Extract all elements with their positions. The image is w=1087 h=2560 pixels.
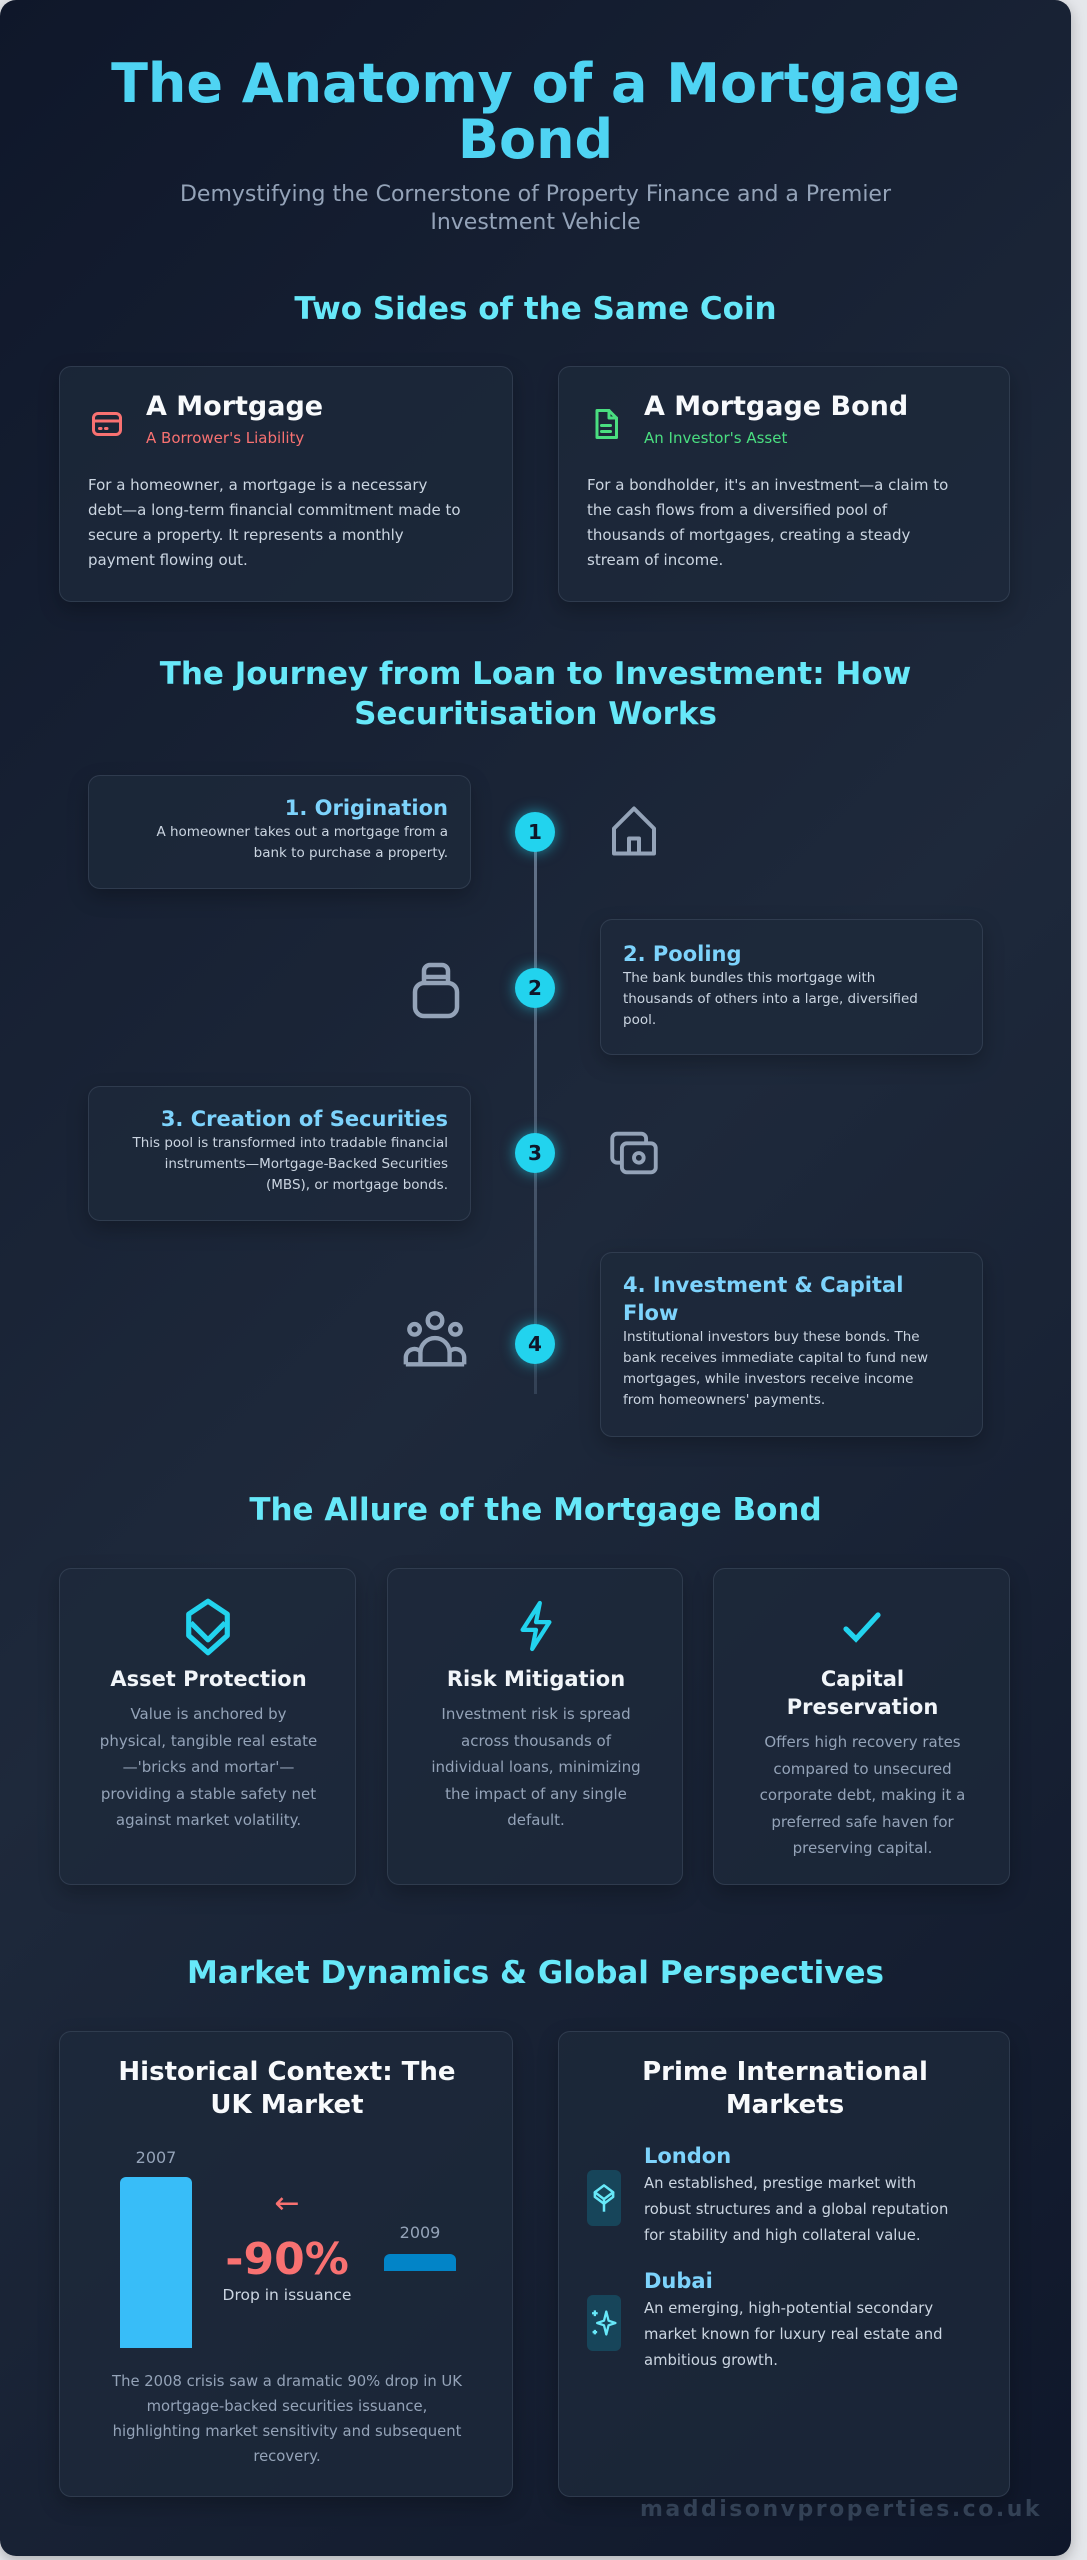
heading: market: Market Dynamics & Global Perspectives [187,1955,884,1991]
heading: two sides: Two Sides of the Same Coin [294,291,777,327]
step 4: 4. Investment & Capital Flow [623,1273,903,1325]
bar chart: 2009 [400,2223,440,2242]
caption [112,2373,462,2465]
item: london [587,2144,948,2244]
heading: journey: The Journey from Loan to Investment: How Securitisation Works [160,656,911,732]
item: dubai: market known for luxury real estate and [644,2326,942,2343]
panel: capital preservation: Capital Preservation [787,1667,938,1719]
panel: asset protection: Asset Protection [110,1667,307,1691]
heading: A Mortgage Bond [644,391,908,422]
icon: check [843,1612,881,1643]
icon: document [596,409,618,439]
panel: asset protection [59,1568,356,1885]
step 2 [600,919,983,1055]
step 3: This pool is transformed into tradable financial instruments—Mortgage-Backed Securities (MBS), or mortgage bonds. [132,1135,448,1193]
bar chart: 2007 [136,2148,176,2167]
marker 3 [515,1133,555,1173]
panel: prime international markets [558,2031,1010,2497]
marker 1: 1 [528,820,542,844]
text: Offers high recovery rates compared to unsecured corporate debt, making it a preferred safe haven for preserving capital. [760,1733,965,1857]
timeline line [534,832,537,1394]
marker 2: 2 [528,976,542,1000]
title: The Anatomy of a Mortgage Bond [111,52,960,171]
watermark: maddisonvproperties.co.uk [640,2497,1042,2522]
text: Value is anchored by physical, tangible real estate —'bricks and mortar'—providing a stable safety net against market volatility. [100,1705,317,1829]
item: dubai: An emerging, high-potential secondary [644,2300,933,2317]
subheading: An Investor's Asset [644,429,787,447]
caption: highlighting market sensitivity and subsequent [113,2423,461,2440]
arrow: ← [274,2186,300,2221]
icon: card [92,412,122,436]
marker 3: 3 [528,1141,542,1165]
marker 4 [515,1324,555,1364]
step 3 [88,1086,471,1221]
heading: Prime International Markets [642,2057,928,2120]
marker 4: 4 [528,1332,542,1356]
text: Investment risk is spread across thousands of individual loans, minimizing the impact of any single default. [431,1705,641,1829]
bar chart [120,2148,456,2348]
bar chart: Drop in issuance [223,2286,351,2304]
panel: a mortgage bond [558,366,1010,602]
text [587,476,948,569]
icon: users [404,1311,466,1366]
icon: shield [186,1598,230,1656]
panel: a mortgage [59,366,513,602]
subtitle: Demystifying the Cornerstone of Property Finance and a Premier Investment Vehicle [180,182,891,235]
item: dubai: Dubai [644,2269,713,2293]
marker 1 [515,812,555,852]
item: london: An established, prestige market with [644,2175,916,2192]
step 4 [600,1252,983,1437]
step 4: Institutional investors buy these bonds. The bank receives immediate capital to fund new mortgages, while investors receive income from homeowners' payments. [623,1329,928,1408]
text: the cash flows from a diversified pool of [587,501,887,519]
icon: cash [610,1132,658,1174]
heading: Historical Context: The UK Market [118,2057,456,2120]
icon: pool [412,962,460,1018]
panel: capital preservation [713,1568,1010,1885]
item: dubai [587,2269,942,2369]
caption: recovery. [253,2448,321,2465]
icon: house [612,806,656,856]
text: For a bondholder, it's an investment—a claim to [587,476,948,494]
step 1: A homeowner takes out a mortgage from a bank to purchase a property. [156,824,448,861]
caption: mortgage-backed securities issuance, [147,2398,427,2415]
step 2: The bank bundles this mortgage with thousands of others into a large, diversified pool. [623,970,918,1028]
item: london: London [644,2144,731,2168]
panel: risk mitigation: Risk Mitigation [447,1667,625,1691]
panel: risk mitigation [387,1568,683,1885]
item: london: robust structures and a global reputation [644,2201,948,2218]
caption: The 2008 crisis saw a dramatic 90% drop in UK [112,2373,462,2390]
heading: A Mortgage [146,391,323,422]
text: For a homeowner, a mortgage is a necessary debt—a long-term financial commitment made to secure a property. It represents a monthly payment flowing out. [88,476,461,569]
heading: allure: The Allure of the Mortgage Bond [249,1492,822,1528]
step 1: 1. Origination [285,796,448,820]
step 1 [88,775,471,889]
icon: lightning [520,1600,552,1652]
item: london: for stability and high collateral value. [644,2227,921,2244]
step 2: 2. Pooling [623,942,742,966]
bar chart: -90% [225,2234,349,2285]
step 3: 3. Creation of Securities [161,1107,448,1131]
item: dubai: ambitious growth. [644,2352,778,2369]
marker 2 [515,968,555,1008]
text: thousands of mortgages, creating a steady [587,526,910,544]
panel: historical context [59,2031,513,2497]
subheading: A Borrower's Liability [146,429,304,447]
text: stream of income. [587,551,723,569]
